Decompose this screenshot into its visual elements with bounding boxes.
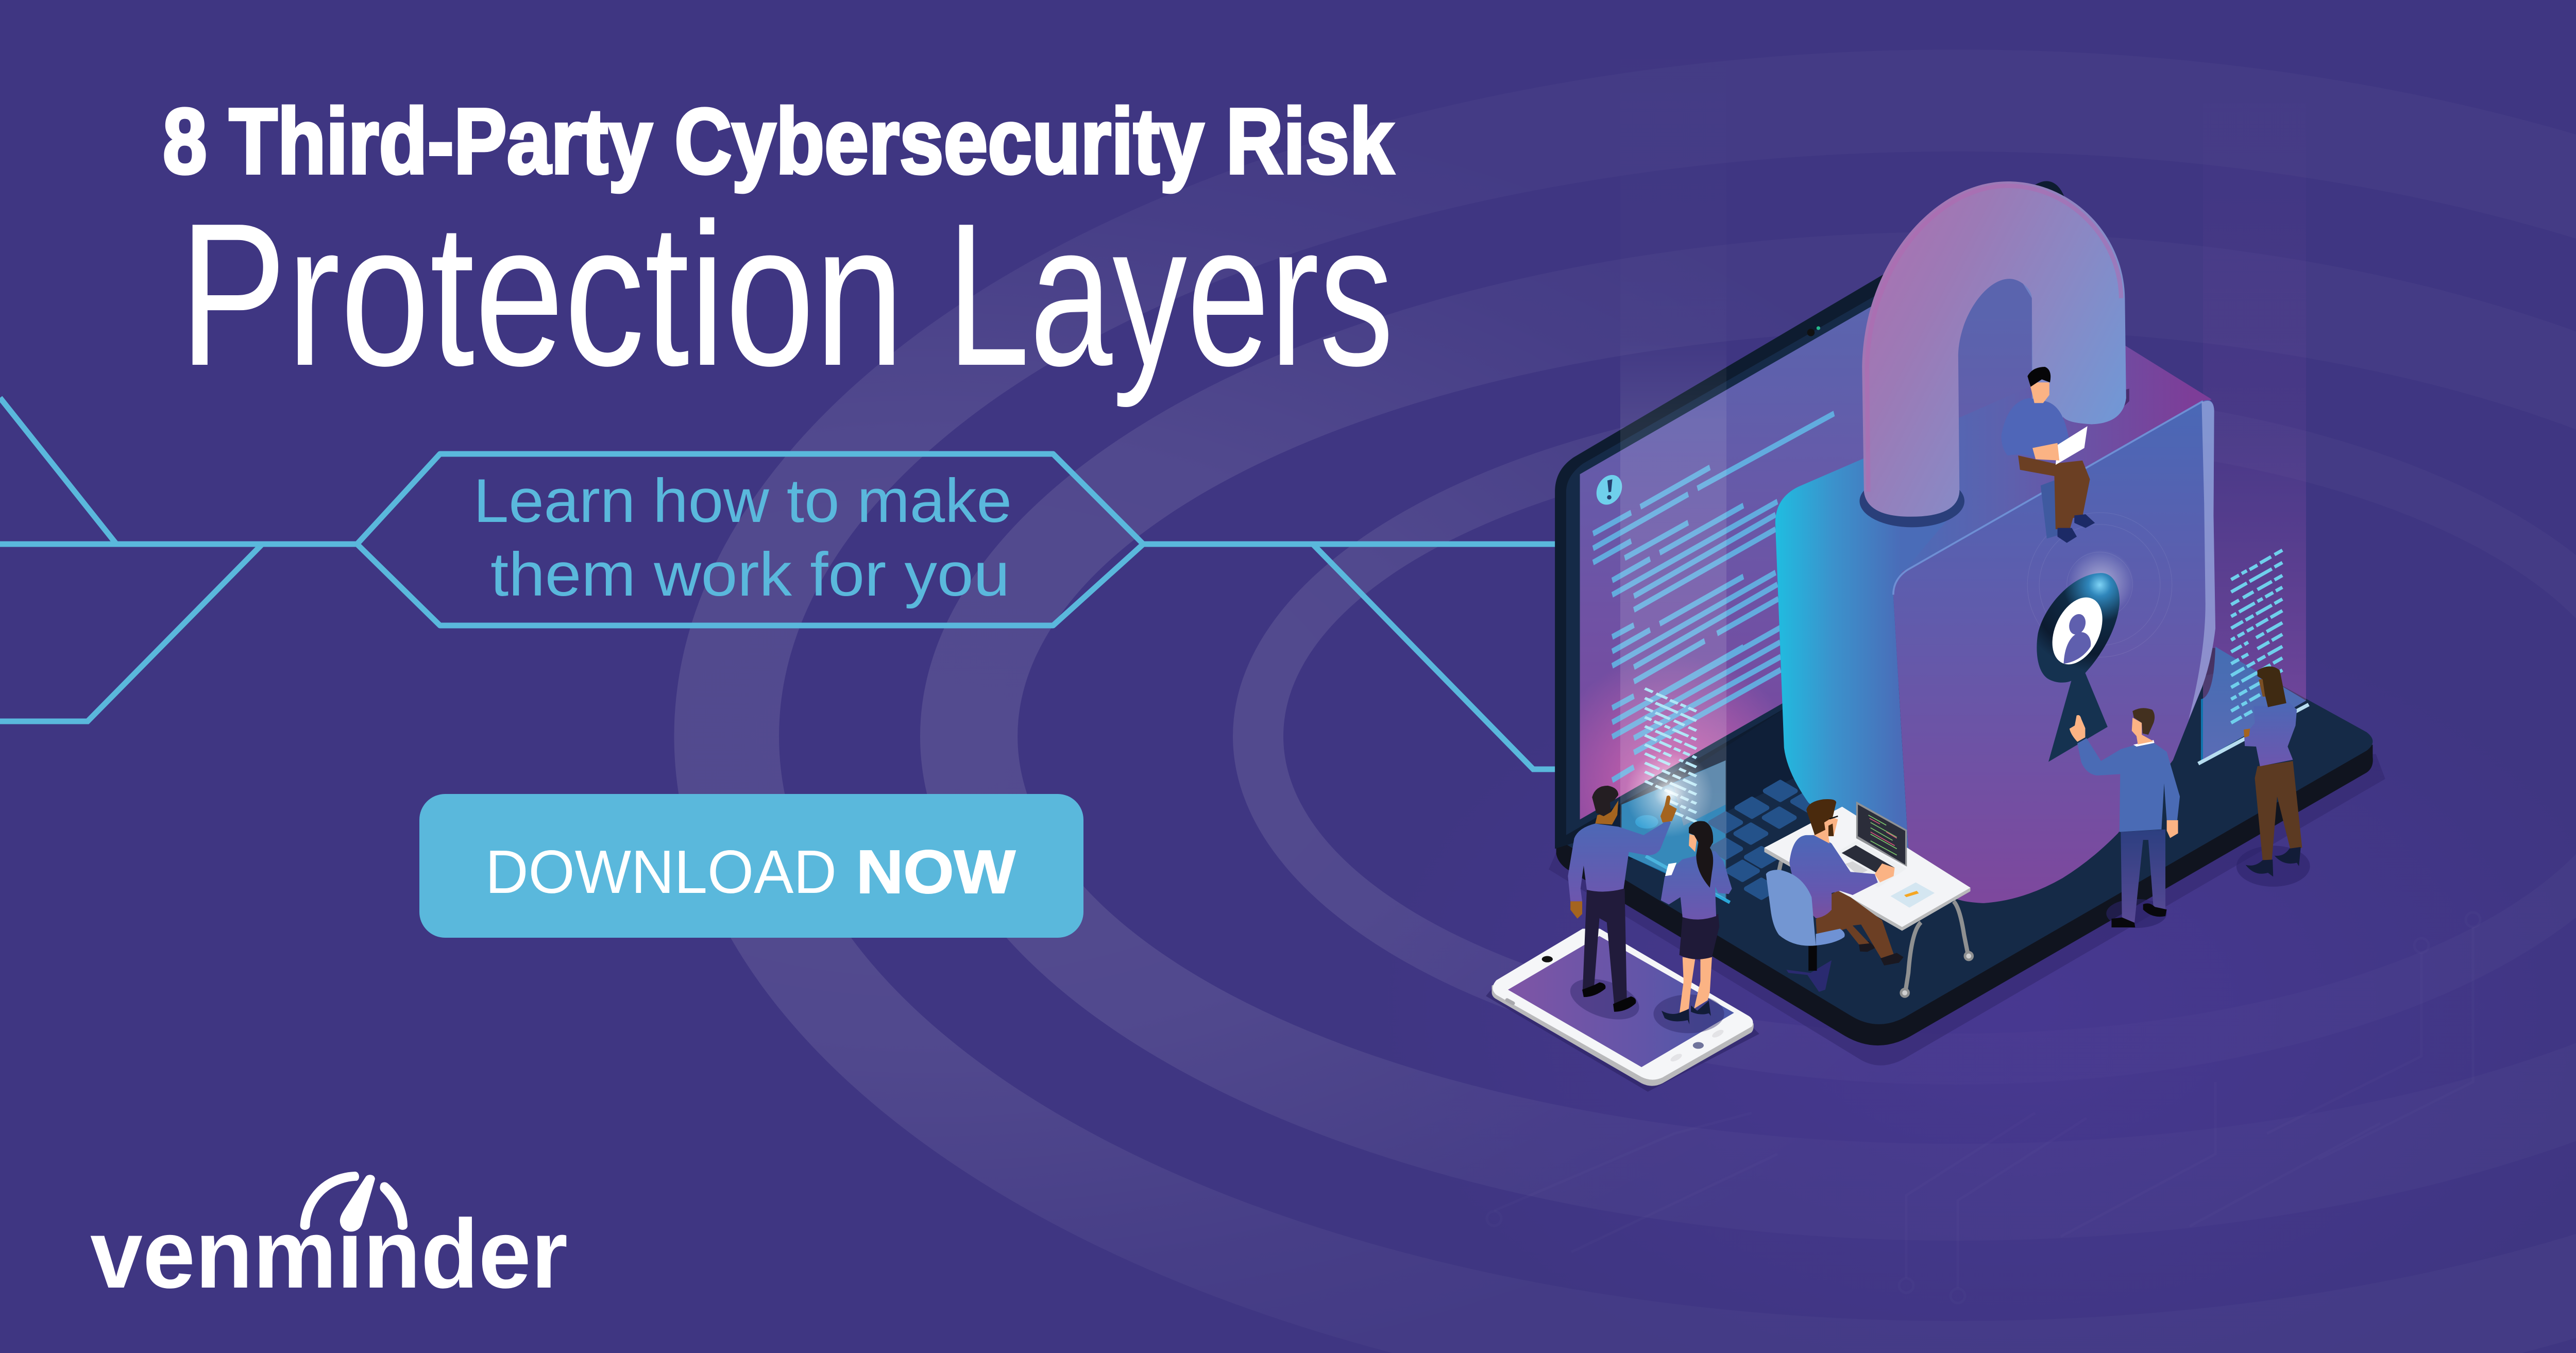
subtitle hexagon callout — [357, 454, 1143, 625]
keyhole — [2027, 513, 2172, 762]
padlock right edge highlight — [2189, 401, 2215, 720]
tablet soft keys — [1669, 1028, 1725, 1063]
chair seat — [1816, 928, 1845, 945]
tablet screen — [1508, 936, 1734, 1067]
keyboard keys — [1710, 782, 1823, 898]
webcam — [1807, 326, 1820, 336]
desk legs — [1779, 861, 1968, 993]
shackle rim shading — [1867, 186, 2121, 492]
code lines on screen — [1593, 414, 1834, 780]
download button — [419, 794, 1083, 938]
woman with phone — [1661, 821, 1732, 1024]
button label regular: DOWNLOAD — [485, 838, 837, 906]
right hologram panel — [2198, 647, 2309, 764]
venminder logo — [90, 1172, 568, 1309]
title word Layers: Layers — [947, 180, 1394, 409]
background glow behind illustration — [1365, 593, 2576, 1353]
left hologram panel on keyboard — [1621, 760, 1730, 902]
left hologram data blocks — [1645, 688, 1697, 822]
padlock left side — [1775, 454, 1961, 900]
developer legs — [1816, 891, 1894, 958]
isometric laptop and padlock illustration — [1486, 0, 2385, 1092]
tablet body side — [1492, 973, 1754, 1086]
shackle right socket shadow — [2067, 388, 2129, 424]
desk wheels — [1901, 952, 1973, 996]
laptop screen bezel — [1555, 181, 2067, 849]
chair base — [1786, 960, 1832, 992]
padlock — [1775, 181, 2215, 903]
right glass pillar — [2203, 103, 2306, 759]
left glass pillar — [1620, 0, 1726, 899]
chair stem — [1808, 943, 1817, 971]
developer torso — [1789, 835, 1878, 918]
background concentric rings — [674, 49, 2576, 1353]
hand touch glow — [1625, 750, 1713, 837]
tablet body top — [1493, 928, 1753, 1080]
padlock top face — [1780, 345, 2212, 571]
person sitting on padlock with laptop — [2001, 367, 2095, 543]
right hologram data blocks — [2231, 550, 2282, 723]
tablet — [1486, 928, 1759, 1092]
button label bold: NOW — [856, 838, 1016, 906]
padlock front face — [1893, 400, 2215, 903]
laptop shadow — [1549, 754, 2385, 1066]
hexagon outline — [357, 454, 1143, 625]
desk laptop — [1839, 802, 1907, 888]
callout text line two: them work for you — [490, 540, 1010, 609]
keyhole portrait — [2042, 589, 2112, 672]
keyhole glow — [2068, 549, 2134, 615]
button shape — [419, 794, 1083, 938]
developer hand — [1875, 864, 1895, 883]
warning icon on screen — [1591, 470, 1627, 509]
desk top — [1764, 807, 1971, 931]
shackle socket — [1859, 475, 1964, 527]
circuit connector lines — [0, 398, 1561, 769]
tablet camera — [1542, 956, 1553, 962]
portrait user silhouette — [2064, 612, 2091, 664]
person pointing at keyhole — [2070, 708, 2180, 928]
padlock front edge highlight — [1893, 401, 2203, 595]
man touching hologram — [1568, 786, 1677, 1012]
keyhole shape — [2037, 573, 2120, 762]
title line two — [179, 180, 1394, 409]
developer head — [1814, 817, 1838, 843]
shackle tube — [1862, 181, 2126, 517]
faint circuit traces — [1487, 912, 2480, 1303]
tablet shadow — [1486, 984, 1759, 1092]
laptop screen — [1580, 208, 2067, 819]
developer shoes — [1859, 941, 1876, 952]
logo wordmark: venminder — [90, 1199, 568, 1309]
chair back — [1766, 870, 1816, 946]
notepad and pencil — [1890, 883, 1935, 908]
keyhole glow rings — [2027, 513, 2172, 657]
title line one: 8 Third-Party Cybersecurity Risk — [163, 90, 1394, 193]
tablet home button — [1693, 1042, 1704, 1049]
desk with seated developer — [1764, 799, 1973, 996]
callout text line one: Learn how to make — [473, 466, 1012, 535]
shackle inner wall — [2020, 279, 2063, 420]
woman standing at right hologram — [2236, 666, 2310, 887]
tablet speaker — [1504, 997, 1516, 1006]
laptop screen inner bezel — [1566, 198, 2067, 835]
foot shadows — [1565, 971, 1724, 1033]
laptop base — [1556, 648, 2373, 1045]
title word Protection: Protection — [179, 180, 904, 408]
logo gauge icon — [300, 1172, 408, 1231]
screen pink glow — [1580, 529, 1792, 819]
